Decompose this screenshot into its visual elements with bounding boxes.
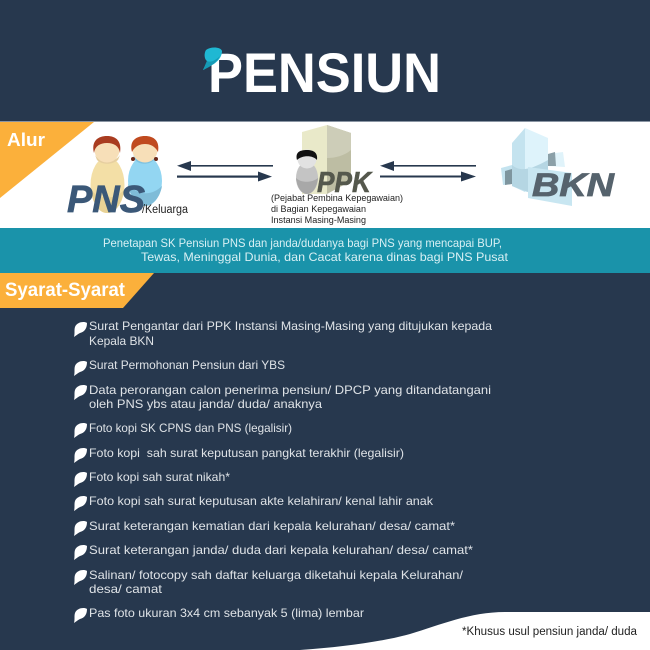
item 11: Pas foto ukuran 3x4 cm sebanyak 5 (lima) lembar	[89, 606, 364, 620]
list: requirements	[74, 319, 492, 623]
panel: teal description band	[0, 228, 650, 273]
item 1: Surat Pengantar dari PPK Instansi Masing-Masing yang ditujukan kepada	[89, 319, 492, 333]
panel: teal description band: Penetapan SK Pensiun PNS dan janda/dudanya bagi PNS yang mencapai BUP,	[103, 236, 502, 250]
item 4: Foto kopi SK CPNS dan PNS (legalisir)	[89, 421, 292, 435]
icon: BKN building	[501, 128, 572, 206]
item 3	[74, 383, 491, 411]
orange corner tab	[0, 122, 94, 198]
arrows: PNS to PPK	[177, 161, 273, 182]
icon: PNS family figures	[90, 136, 162, 213]
panel: teal description band: Tewas, Meninggal Dunia, dan Cacat karena dinas bagi PNS Pusat	[141, 250, 509, 264]
item 1: Kepala BKN	[89, 334, 154, 348]
icon: PPK building and person	[296, 125, 351, 194]
item 5: Foto kopi sah surat keputusan pangkat terakhir (legalisir)	[89, 446, 404, 460]
footnote: *Khusus usul pensiun janda/ duda	[462, 626, 638, 638]
item 10	[74, 568, 464, 596]
label: PNS: PNS	[67, 179, 145, 221]
item 7: Foto kopi sah surat keputusan akte kelahiran/ kenal lahir anak	[89, 494, 434, 508]
heading: Syarat-Syarat: Syarat-Syarat	[5, 280, 126, 301]
label: BKN: BKN	[532, 167, 615, 203]
heading: Alur: Alur	[7, 130, 45, 150]
arrows: PPK to BKN	[380, 161, 476, 182]
text: PPK description: (Pejabat Pembina Kepegawaian)	[271, 193, 403, 204]
item 1	[74, 319, 492, 348]
item 10: desa/ camat	[89, 582, 163, 596]
icon: teal feather	[203, 47, 222, 70]
item 6: Foto kopi sah surat nikah*	[89, 470, 230, 484]
item 10: Salinan/ fotocopy sah daftar keluarga diketahui kepala Kelurahan/	[89, 568, 464, 582]
item 3: Data perorangan calon penerima pensiun/ DPCP yang ditandatangani	[89, 383, 491, 397]
item 2: Surat Permohonan Pensiun dari YBS	[89, 358, 285, 372]
text: PPK description: di Bagian Kepegawaian	[271, 204, 366, 215]
text: PPK description: Instansi Masing-Masing	[271, 215, 366, 226]
panel: alur flow	[0, 121, 650, 228]
item 8: Surat keterangan kematian dari kepala kelurahan/ desa/ camat*	[89, 519, 455, 533]
label: PPK: PPK	[317, 167, 373, 199]
item 3: oleh PNS ybs atau janda/ duda/ anaknya	[89, 397, 322, 411]
label: Keluarga: /Keluarga	[142, 204, 189, 216]
text: PPK description	[271, 193, 403, 226]
footer white curve with note	[300, 612, 650, 650]
heading: Syarat-Syarat	[0, 273, 154, 308]
item 9: Surat keterangan janda/ duda dari kepala kelurahan/ desa/ camat*	[89, 543, 473, 557]
title: PENSIUN	[208, 41, 441, 104]
